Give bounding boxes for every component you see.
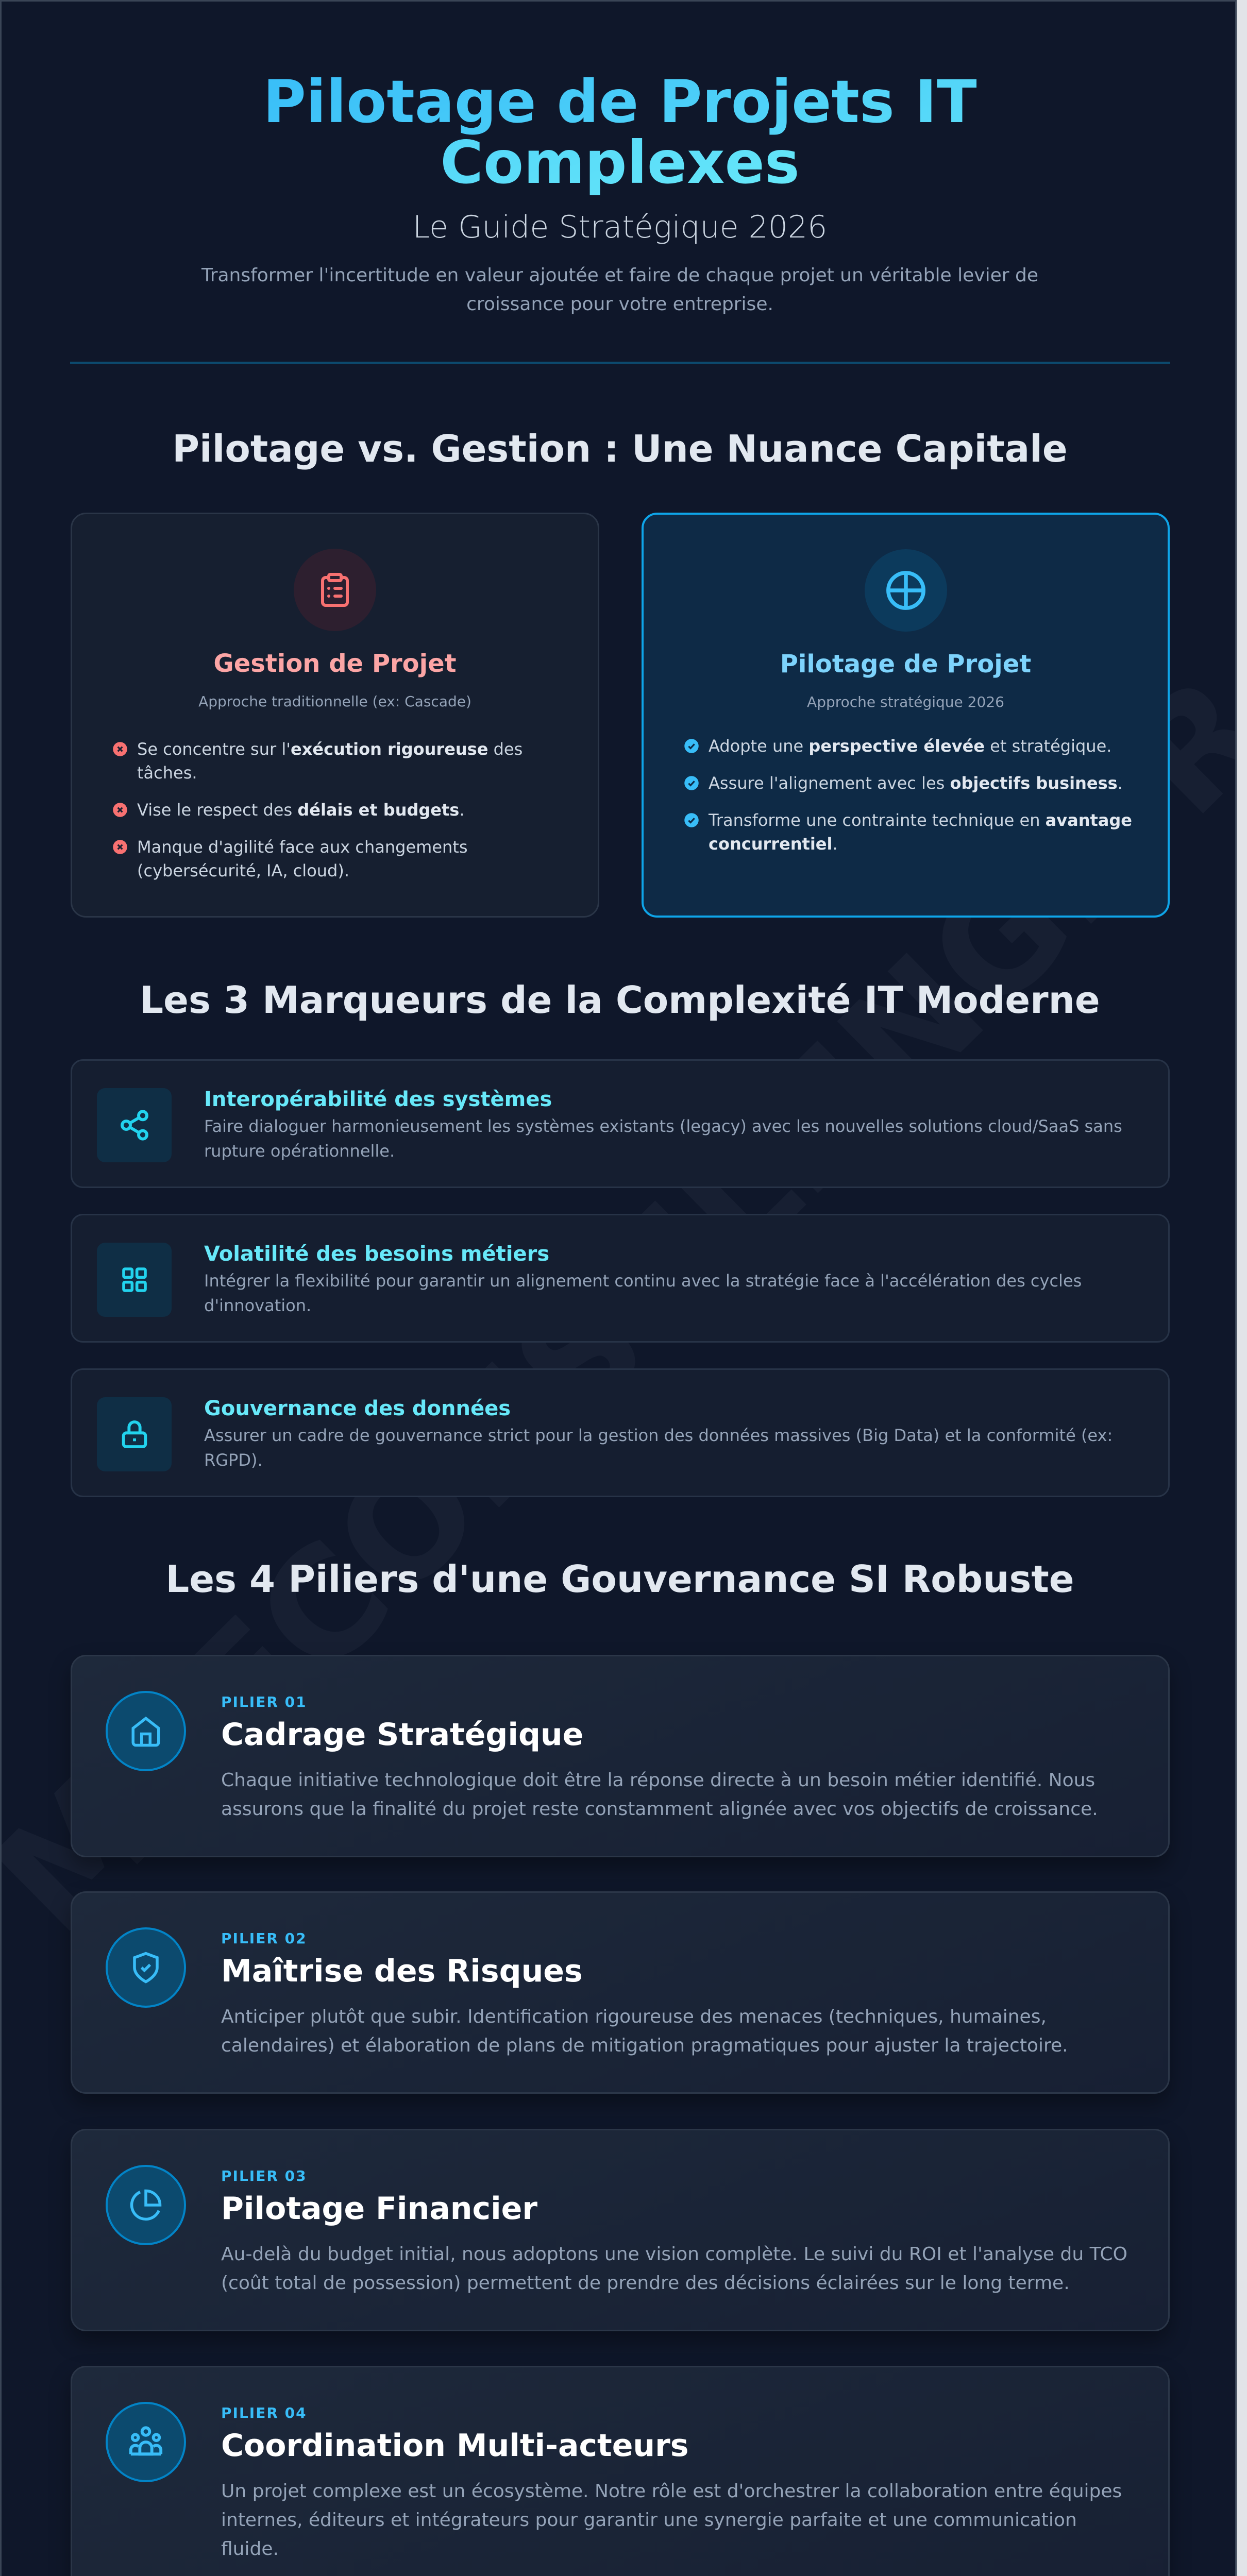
- pillar 02: [71, 1891, 1170, 2094]
- bullet list: [684, 736, 1132, 854]
- marker: gouvernance: [71, 1368, 1170, 1497]
- bullet list: Se concentre sur l'exécution rigoureuse des tâches.: [137, 739, 523, 783]
- icon: clipboard: [294, 549, 376, 631]
- pillar label: PILIER 01: [221, 1693, 307, 1710]
- marker text: Faire dialoguer harmonieusement les systèmes existants (legacy) avec les nouvelles solutions cloud/SaaS sans rupture opérationnelle.: [204, 1116, 1122, 1161]
- title: [263, 67, 977, 197]
- icon: grid: [97, 1243, 172, 1317]
- panel: gestion de projet: [71, 513, 599, 918]
- icon: pie chart: [106, 2165, 186, 2245]
- pillar 01: [71, 1655, 1170, 1857]
- pillar label: PILIER 03: [221, 2167, 307, 2184]
- card title: Pilotage de Projet: [780, 650, 1031, 679]
- card title: Gestion de Projet: [213, 649, 457, 678]
- bullet list: Assure l'alignement avec les objectifs business.: [709, 773, 1123, 793]
- icon: crosshair: [865, 549, 947, 632]
- title: Complexes: [440, 128, 800, 197]
- marker title: Volatilité des besoins métiers: [204, 1242, 549, 1266]
- heading: 3 marqueurs: Les 3 Marqueurs de la Complexité IT Moderne: [140, 978, 1100, 1022]
- pillar title: Pilotage Financier: [221, 2191, 537, 2227]
- icon: share: [97, 1088, 172, 1162]
- pillar text: Au-delà du budget initial, nous adoptons une vision complète. Le suivi du ROI et l'analyse du TCO (coût total de possession) permettent de prendre des décisions éclairées sur le long terme.: [221, 2244, 1127, 2294]
- intro text: Transformer l'incertitude en valeur ajoutée et faire de chaque projet un véritable levier de croissance pour votre entreprise.: [201, 265, 1038, 315]
- marker text: Intégrer la flexibilité pour garantir un alignement continu avec la stratégie face à l'accélération des cycles d'innovation.: [204, 1271, 1082, 1315]
- pillar text: Anticiper plutôt que subir. Identification rigoureuse des menaces (techniques, humaines, calendaires) et élaboration de plans de mitigation pragmatiques pour ajuster la trajectoire.: [221, 2006, 1068, 2056]
- card subtitle: Approche traditionnelle (ex: Cascade): [198, 693, 471, 710]
- marker text: Assurer un cadre de gouvernance strict pour la gestion des données massives (Big Data) et la conformité (ex: RGPD).: [204, 1426, 1113, 1470]
- subtitle: Le Guide Stratégique 2026: [413, 209, 827, 245]
- title: Pilotage de Projets IT: [263, 67, 977, 136]
- marker: volatilite: [71, 1214, 1170, 1343]
- icon: users: [106, 2402, 186, 2482]
- pillar title: Cadrage Stratégique: [221, 1717, 583, 1753]
- bullet list: [113, 739, 523, 880]
- marker: interoperabilite: [71, 1059, 1170, 1188]
- pillar text: Un projet complexe est un écosystème. Notre rôle est d'orchestrer la collaboration entre équipes internes, éditeurs et intégrateurs pour garantir une synergie parfaite et une communication fluide.: [221, 2481, 1122, 2560]
- card subtitle: Approche stratégique 2026: [807, 693, 1004, 710]
- bullet list: Adopte une perspective élevée et stratégique.: [709, 736, 1111, 756]
- pillar title: Coordination Multi-acteurs: [221, 2428, 688, 2464]
- bullet list: Transforme une contrainte technique en avantage concurrentiel.: [709, 810, 1132, 854]
- pillar text: Chaque initiative technologique doit être la réponse directe à un besoin métier identifié. Nous assurons que la finalité du projet reste constamment alignée avec vos objectifs de croissance.: [221, 1770, 1098, 1820]
- icon: house: [106, 1691, 186, 1771]
- icon: lock: [97, 1397, 172, 1471]
- pillar 04: [71, 2366, 1170, 2576]
- bullet list: Vise le respect des délais et budgets.: [137, 800, 465, 820]
- pillar label: PILIER 02: [221, 1930, 307, 1947]
- pillar title: Maîtrise des Risques: [221, 1953, 583, 1989]
- pillar label: PILIER 04: [221, 2404, 307, 2421]
- bullet list: Manque d'agilité face aux changements (cybersécurité, IA, cloud).: [137, 837, 468, 880]
- marker title: Interopérabilité des systèmes: [204, 1088, 552, 1111]
- heading: 4 piliers: Les 4 Piliers d'une Gouvernance SI Robuste: [165, 1557, 1074, 1601]
- pillar 03: [71, 2129, 1170, 2331]
- panel: pilotage de projet: [642, 513, 1170, 918]
- icon: shield: [106, 1927, 186, 2008]
- marker title: Gouvernance des données: [204, 1397, 511, 1420]
- heading: pilotage vs gestion: Pilotage vs. Gestion : Une Nuance Capitale: [172, 427, 1068, 470]
